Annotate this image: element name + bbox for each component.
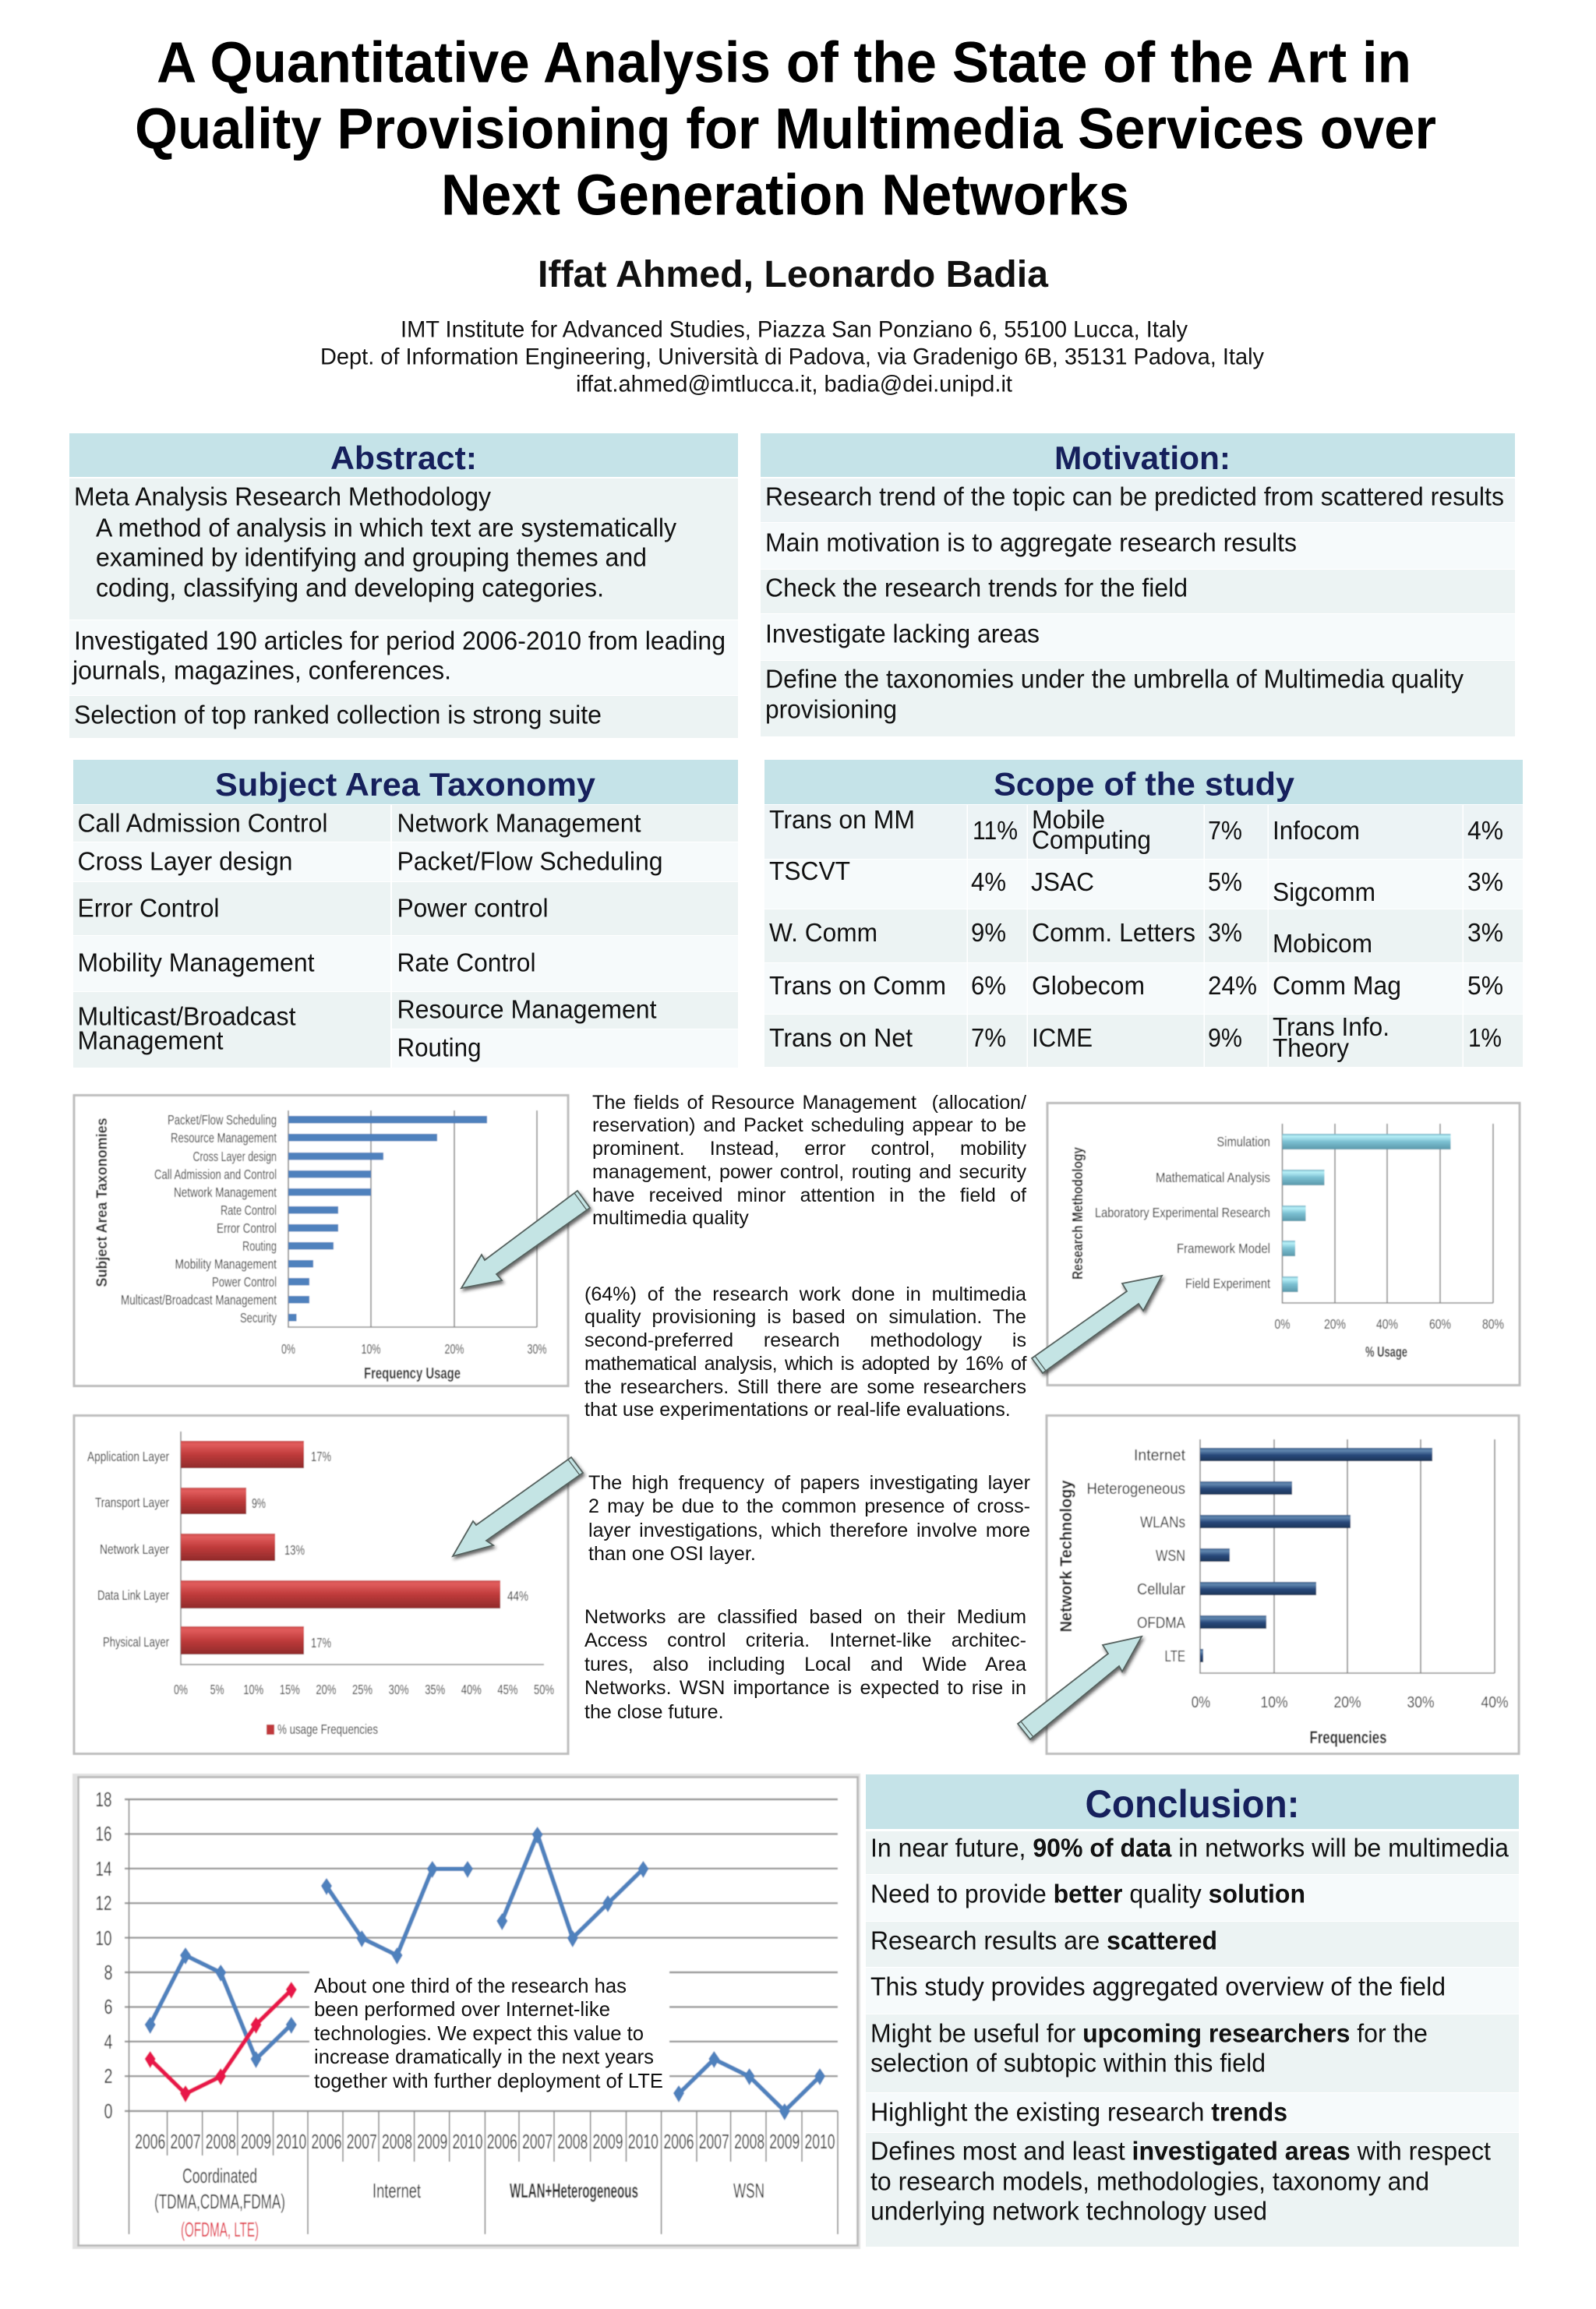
motivation text: Define the taxonomies under the umbrella of Multimedia quality — [765, 664, 1464, 694]
x axis labels: 0% — [174, 1682, 188, 1697]
scope table entries: Mobicom — [1273, 929, 1372, 958]
text block: layer commentary: 2 may be due to the common presence of cross- — [588, 1495, 1030, 1517]
layer labels: Physical Layer — [103, 1634, 169, 1650]
year labels: 2010 — [276, 2130, 306, 2153]
category labels: Mobility Management — [175, 1256, 277, 1272]
text block: layer commentary — [588, 1471, 1030, 1565]
technology labels: OFDMA — [1137, 1614, 1185, 1632]
text block: methodology commentary: mathematical analysis, which is adopted by 16% of — [584, 1353, 1026, 1375]
taxonomy entries — [78, 809, 662, 1061]
heading: motivation: Motivation: — [1054, 440, 1231, 476]
scope table entries: Comm. Letters — [1032, 918, 1195, 947]
scope table entries: Computing — [1032, 825, 1151, 854]
x axis labels: 40% — [1481, 1693, 1509, 1711]
x axis labels — [281, 1341, 547, 1357]
affiliations: iffat.ahmed@imtlucca.it, badia@dei.unipd.it — [576, 371, 1013, 397]
group labels: WSN — [733, 2179, 764, 2202]
x axis labels: 20% — [444, 1341, 464, 1357]
value labels: 17% — [311, 1449, 331, 1464]
text block: methodology commentary: quality provisioning is based on simulation. The — [584, 1306, 1026, 1328]
affiliations: IMT Institute for Advanced Studies, Piazza San Ponziano 6, 55100 Lucca, Italy — [401, 316, 1188, 343]
affiliations — [320, 316, 1264, 397]
methodology labels: Framework Model — [1177, 1241, 1270, 1256]
x axis labels: 0% — [1192, 1693, 1210, 1711]
abstract text: coding, classifying and developing categories. — [96, 574, 604, 602]
y axis labels: 10 — [95, 1926, 112, 1950]
year labels: 2007 — [699, 2130, 729, 2153]
motivation text: provisioning — [765, 695, 897, 723]
x axis labels — [1275, 1316, 1504, 1332]
taxonomy entries: Packet/Flow Scheduling — [397, 846, 662, 876]
category labels: Multicast/Broadcast Management — [121, 1292, 277, 1308]
legend: % usage Frequencies — [277, 1721, 378, 1737]
series: coordinated — [145, 1947, 297, 2068]
panel: abstract — [69, 433, 738, 738]
year labels: 2009 — [592, 2130, 623, 2153]
chart: subject area taxonomies frequency usage — [74, 1096, 568, 1386]
scope table entries: Infocom — [1273, 816, 1360, 845]
abstract text: Investigated 190 articles for period 2006-2010 from leading — [74, 627, 726, 655]
taxonomy entries: Multicast/Broadcast — [78, 1002, 296, 1030]
y axis labels — [95, 1788, 112, 2123]
taxonomy entries: Error Control — [78, 893, 220, 923]
x axis labels: 20% — [1324, 1316, 1346, 1332]
chart callout text: increase dramatically in the next years — [314, 2045, 654, 2068]
x axis labels: 20% — [316, 1682, 336, 1697]
year labels — [135, 2130, 835, 2153]
arrow: to network technology chart — [1018, 1636, 1142, 1739]
year labels: 2009 — [769, 2130, 800, 2153]
abstract text — [72, 482, 726, 729]
scope table entries: 4% — [1467, 816, 1503, 845]
scope table entries: Comm Mag — [1273, 971, 1401, 1000]
text block: methodology commentary: second-preferred research methodology is — [584, 1329, 1026, 1351]
taxonomy entries: Mobility Management — [78, 948, 315, 977]
group labels: WLAN+Heterogeneous — [510, 2179, 638, 2202]
technology labels: WLANs — [1140, 1513, 1185, 1531]
scope table entries: 3% — [1467, 867, 1503, 896]
conclusion text: Research results are scattered — [870, 1926, 1217, 1954]
motivation text: Main motivation is to aggregate research results — [765, 528, 1297, 556]
poster title: A Quantitative Analysis of the State of the Art in — [157, 30, 1411, 95]
year labels: 2009 — [417, 2130, 447, 2153]
x axis labels: 0% — [1275, 1316, 1291, 1332]
scope table entries: 5% — [1208, 867, 1242, 896]
value labels: 13% — [284, 1542, 305, 1558]
category labels: Power Control — [212, 1274, 277, 1290]
x axis labels: 20% — [1334, 1693, 1361, 1711]
text block: layer commentary: The high frequency of papers investigating layer — [588, 1471, 1030, 1493]
motivation text: Research trend of the topic can be predicted from scattered results — [765, 482, 1504, 511]
text block: methodology commentary: that use experimentations or real-life evaluations. — [584, 1399, 1011, 1421]
x axis labels: 40% — [461, 1682, 482, 1697]
scope table entries: 3% — [1208, 918, 1242, 947]
x axis labels: 30% — [389, 1682, 409, 1697]
conclusion text: Highlight the existing research trends — [870, 2098, 1287, 2126]
technology labels: Internet — [1134, 1446, 1185, 1464]
poster title — [135, 30, 1436, 228]
category labels: Resource Management — [171, 1130, 277, 1146]
taxonomy entries: Rate Control — [397, 948, 536, 977]
text block: network commentary — [584, 1606, 1026, 1723]
text block: layer commentary: layer investigations, which therefore involve more — [588, 1520, 1030, 1541]
scope table entries: 24% — [1208, 971, 1257, 1000]
text block: network commentary: the close future. — [584, 1701, 724, 1723]
series: OFDMA and LTE — [145, 1982, 297, 2102]
x axis labels: 45% — [497, 1682, 517, 1697]
conclusion text: Need to provide better quality solution — [870, 1880, 1305, 1908]
x axis labels: 25% — [352, 1682, 373, 1697]
year labels: 2010 — [804, 2130, 835, 2153]
scope table entries: Trans Info. — [1273, 1012, 1389, 1041]
year labels: 2008 — [734, 2130, 764, 2153]
text block: subject area commentary: The fields of Resource Management (allocation/ — [592, 1091, 1026, 1113]
scope table entries: 7% — [1208, 816, 1242, 845]
scope table entries: 9% — [1208, 1023, 1242, 1052]
taxonomy entries: Cross Layer design — [78, 846, 293, 876]
scope table entries: Trans on Comm — [769, 971, 946, 1000]
chart: network technology frequencies — [1047, 1415, 1519, 1753]
taxonomy entries: Management — [78, 1026, 223, 1055]
text block: methodology commentary — [584, 1283, 1027, 1421]
methodology labels: Field Experiment — [1185, 1276, 1270, 1291]
scope table entries: Sigcomm — [1273, 877, 1375, 906]
y axis labels: 16 — [95, 1822, 112, 1845]
text block: methodology commentary: the researchers. Still there are some researchers — [584, 1376, 1026, 1398]
affiliations: Dept. of Information Engineering, Università di Padova, via Gradenigo 6B, 35131 Padova, Italy — [320, 344, 1264, 369]
chart: publications per year by network technology — [75, 1776, 858, 2247]
x axis labels: 10% — [362, 1341, 380, 1357]
value labels: 17% — [311, 1635, 331, 1651]
heading: scope of the study: Scope of the study — [994, 765, 1295, 803]
callout background — [309, 1962, 669, 2110]
scope table entries: Mobile — [1032, 805, 1105, 834]
scope table entries: JSAC — [1031, 867, 1094, 896]
methodology labels: Laboratory Experimental Research — [1095, 1205, 1270, 1220]
technology labels — [1086, 1446, 1185, 1665]
layer labels: Transport Layer — [95, 1495, 169, 1510]
panel: scope of the study — [764, 760, 1523, 1067]
x axis labels — [174, 1682, 554, 1697]
motivation text — [765, 482, 1504, 723]
scope table entries: 1% — [1468, 1023, 1502, 1052]
x axis labels: 10% — [1261, 1693, 1287, 1711]
group labels — [154, 2164, 764, 2241]
layer labels: Application Layer — [87, 1449, 169, 1464]
bars: subject area frequencies — [288, 1116, 487, 1322]
conclusion text — [870, 1833, 1509, 2226]
group labels: Internet — [373, 2179, 422, 2202]
group labels: (TDMA,CDMA,FDMA) — [154, 2190, 285, 2213]
x axis labels: 60% — [1429, 1316, 1451, 1332]
methodology labels: Simulation — [1216, 1134, 1270, 1149]
methodology labels: Mathematical Analysis — [1156, 1170, 1270, 1185]
authors: Iffat Ahmed, Leonardo Badia — [538, 254, 1048, 295]
category labels: Security — [240, 1310, 277, 1326]
x axis labels: 50% — [534, 1682, 554, 1697]
chart callout text: About one third of the research has — [314, 1974, 627, 1997]
group labels: Coordinated — [182, 2164, 257, 2187]
x axis labels: 40% — [1376, 1316, 1398, 1332]
x axis labels: 0% — [281, 1341, 295, 1357]
poster title: Next Generation Networks — [441, 162, 1129, 228]
x axis labels: 10% — [243, 1682, 263, 1697]
y axis title: Research Methodology — [1070, 1147, 1086, 1280]
taxonomy entries: Call Admission Control — [78, 809, 327, 837]
category labels: Network Management — [174, 1185, 277, 1200]
abstract text: A method of analysis in which text are systematically — [96, 513, 676, 542]
text block: network commentary: Networks are classified based on their Medium — [584, 1606, 1026, 1628]
x axis labels — [1192, 1693, 1509, 1711]
year labels: 2006 — [487, 2130, 517, 2153]
y axis labels: 12 — [95, 1891, 112, 1915]
category labels: Cross Layer design — [193, 1149, 277, 1164]
text block: subject area commentary: management, power control, routing and security — [592, 1161, 1026, 1183]
year labels: 2006 — [135, 2130, 165, 2153]
arrow: to subject area chart — [461, 1191, 590, 1288]
text block: subject area commentary: prominent. Instead, error control, mobility — [592, 1138, 1026, 1160]
bars: network technologies — [1200, 1448, 1432, 1662]
year labels: 2007 — [170, 2130, 201, 2153]
x axis labels: 15% — [280, 1682, 300, 1697]
scope table entries: 6% — [971, 971, 1006, 1000]
y axis labels: 4 — [104, 2030, 112, 2053]
scope table entries: Trans on MM — [769, 805, 915, 834]
abstract text: Selection of top ranked collection is strong suite — [74, 700, 602, 729]
y axis labels: 8 — [104, 1961, 112, 1984]
text block: layer commentary: than one OSI layer. — [588, 1543, 756, 1565]
year labels: 2008 — [382, 2130, 412, 2153]
year labels: 2009 — [241, 2130, 271, 2153]
technology labels: Cellular — [1137, 1580, 1185, 1598]
abstract text: examined by identifying and grouping themes and — [96, 542, 647, 572]
x axis labels: 30% — [527, 1341, 547, 1357]
x axis title: Frequency Usage — [364, 1365, 461, 1382]
text block: subject area commentary: multimedia quality — [592, 1207, 749, 1229]
poster title: Quality Provisioning for Multimedia Services over — [135, 97, 1436, 161]
heading: abstract: Abstract: — [330, 440, 477, 476]
taxonomy entries: Resource Management — [397, 994, 656, 1024]
technology labels: WSN — [1156, 1547, 1185, 1565]
group labels: (OFDMA, LTE) — [181, 2218, 259, 2241]
conclusion text: to research models, methodologies, taxonomy and — [870, 2166, 1429, 2196]
category labels: Routing — [242, 1238, 277, 1254]
layer labels — [87, 1449, 169, 1650]
motivation text: Check the research trends for the field — [765, 574, 1188, 602]
year labels: 2007 — [347, 2130, 377, 2153]
y axis labels: 6 — [104, 1995, 112, 2018]
chart: research methodology usage — [1047, 1103, 1520, 1386]
heading: conclusion: Conclusion: — [1085, 1782, 1300, 1826]
series: WSN — [673, 2051, 825, 2120]
scope table entries: Theory — [1273, 1033, 1349, 1062]
taxonomy entries: Network Management — [397, 809, 641, 837]
scope table entries: W. Comm — [769, 918, 877, 947]
scope table entries: Trans on Net — [769, 1023, 913, 1052]
scope table entries: Globecom — [1032, 971, 1145, 1000]
panel: motivation — [761, 433, 1515, 736]
panel: subject area taxonomy — [73, 760, 738, 1068]
taxonomy entries: Power control — [397, 893, 549, 923]
conclusion text: Defines most and least investigated areas with respect — [870, 2137, 1491, 2165]
methodology labels — [1095, 1134, 1270, 1291]
scope table entries — [769, 805, 1503, 1062]
arrow: to methodology chart — [1032, 1276, 1162, 1373]
chart callout text — [314, 1974, 663, 2092]
panel: conclusion — [866, 1774, 1519, 2247]
y axis title: Network Technology — [1058, 1480, 1075, 1632]
category labels: Error Control — [217, 1220, 277, 1236]
category labels — [121, 1112, 277, 1326]
category labels: Packet/Flow Scheduling — [168, 1112, 277, 1128]
scope table entries: 3% — [1467, 918, 1503, 947]
chart: osi layer usage frequencies — [74, 1415, 568, 1753]
text block: subject area commentary — [592, 1091, 1026, 1229]
text block: network commentary: Access control criteria. Internet-like architec- — [584, 1629, 1026, 1651]
conclusion text: underlying network technology used — [870, 2196, 1267, 2226]
scope table entries: 5% — [1467, 971, 1503, 1000]
arrow: to layer chart — [453, 1457, 583, 1556]
value labels — [252, 1449, 528, 1651]
value labels: 44% — [507, 1588, 528, 1604]
x axis title: % Usage — [1365, 1344, 1407, 1360]
chart callout text: been performed over Internet-like — [314, 1997, 610, 2021]
text block: subject area commentary: reservation) and Packet scheduling appear to be — [592, 1114, 1026, 1136]
y axis labels: 2 — [104, 2064, 112, 2088]
conclusion text: Might be useful for upcoming researchers for the — [870, 2018, 1428, 2048]
text block: methodology commentary: (64%) of the research work done in multimedia — [584, 1283, 1026, 1305]
y axis labels: 18 — [95, 1788, 112, 1811]
y axis labels: 14 — [95, 1857, 112, 1880]
conclusion text: This study provides aggregated overview of the field — [870, 1972, 1446, 2001]
year labels: 2008 — [206, 2130, 236, 2153]
scope table entries: 11% — [973, 816, 1018, 845]
x axis labels: 35% — [425, 1682, 445, 1697]
abstract text: Meta Analysis Research Methodology — [74, 482, 491, 511]
year labels: 2008 — [557, 2130, 588, 2153]
bars: layer percentages — [181, 1441, 500, 1654]
text block: network commentary: tures, also including Local and Wide Area — [584, 1654, 1026, 1675]
x axis labels: 30% — [1407, 1693, 1434, 1711]
y axis labels: 0 — [104, 2099, 112, 2123]
conclusion text: selection of subtopic within this field — [870, 2048, 1266, 2078]
series: WLAN and heterogeneous — [496, 1827, 648, 1947]
motivation text: Investigate lacking areas — [765, 619, 1040, 648]
chart callout text: technologies. We expect this value to — [314, 2021, 644, 2045]
conclusion text: In near future, 90% of data in networks will be multimedia — [870, 1833, 1509, 1862]
text block: subject area commentary: have received minor attention in the field of — [592, 1185, 1026, 1206]
bars: methodology percentages — [1283, 1134, 1451, 1292]
taxonomy entries: Routing — [397, 1033, 482, 1061]
x axis labels: 5% — [210, 1682, 224, 1697]
category labels: Call Admission and Control — [154, 1167, 277, 1182]
year labels: 2006 — [664, 2130, 694, 2153]
category labels: Rate Control — [221, 1202, 277, 1218]
layer labels: Network Layer — [100, 1541, 169, 1557]
series: internet — [321, 1861, 473, 1965]
scope table entries: 9% — [971, 918, 1006, 947]
value labels: 9% — [252, 1495, 266, 1511]
year labels: 2010 — [452, 2130, 483, 2153]
scope table entries: TSCVT — [769, 856, 850, 885]
text block: network commentary: Networks. WSN importance is expected to rise in — [584, 1677, 1026, 1699]
y axis title: Subject Area Taxonomies — [94, 1117, 111, 1287]
x axis labels: 80% — [1482, 1316, 1504, 1332]
x axis title: Frequencies — [1309, 1728, 1387, 1747]
layer labels: Data Link Layer — [97, 1587, 169, 1603]
year labels: 2007 — [522, 2130, 553, 2153]
heading: subject area taxonomy: Subject Area Taxonomy — [215, 766, 596, 803]
year labels: 2010 — [628, 2130, 659, 2153]
technology labels: Heterogeneous — [1086, 1480, 1185, 1498]
year labels: 2006 — [312, 2130, 341, 2153]
technology labels: LTE — [1164, 1647, 1185, 1665]
abstract text: journals, magazines, conferences. — [72, 656, 451, 684]
scope table entries: 7% — [971, 1023, 1006, 1052]
chart callout text: together with further deployment of LTE — [314, 2069, 663, 2092]
scope table entries: ICME — [1032, 1023, 1093, 1052]
scope table entries: 4% — [971, 867, 1006, 896]
